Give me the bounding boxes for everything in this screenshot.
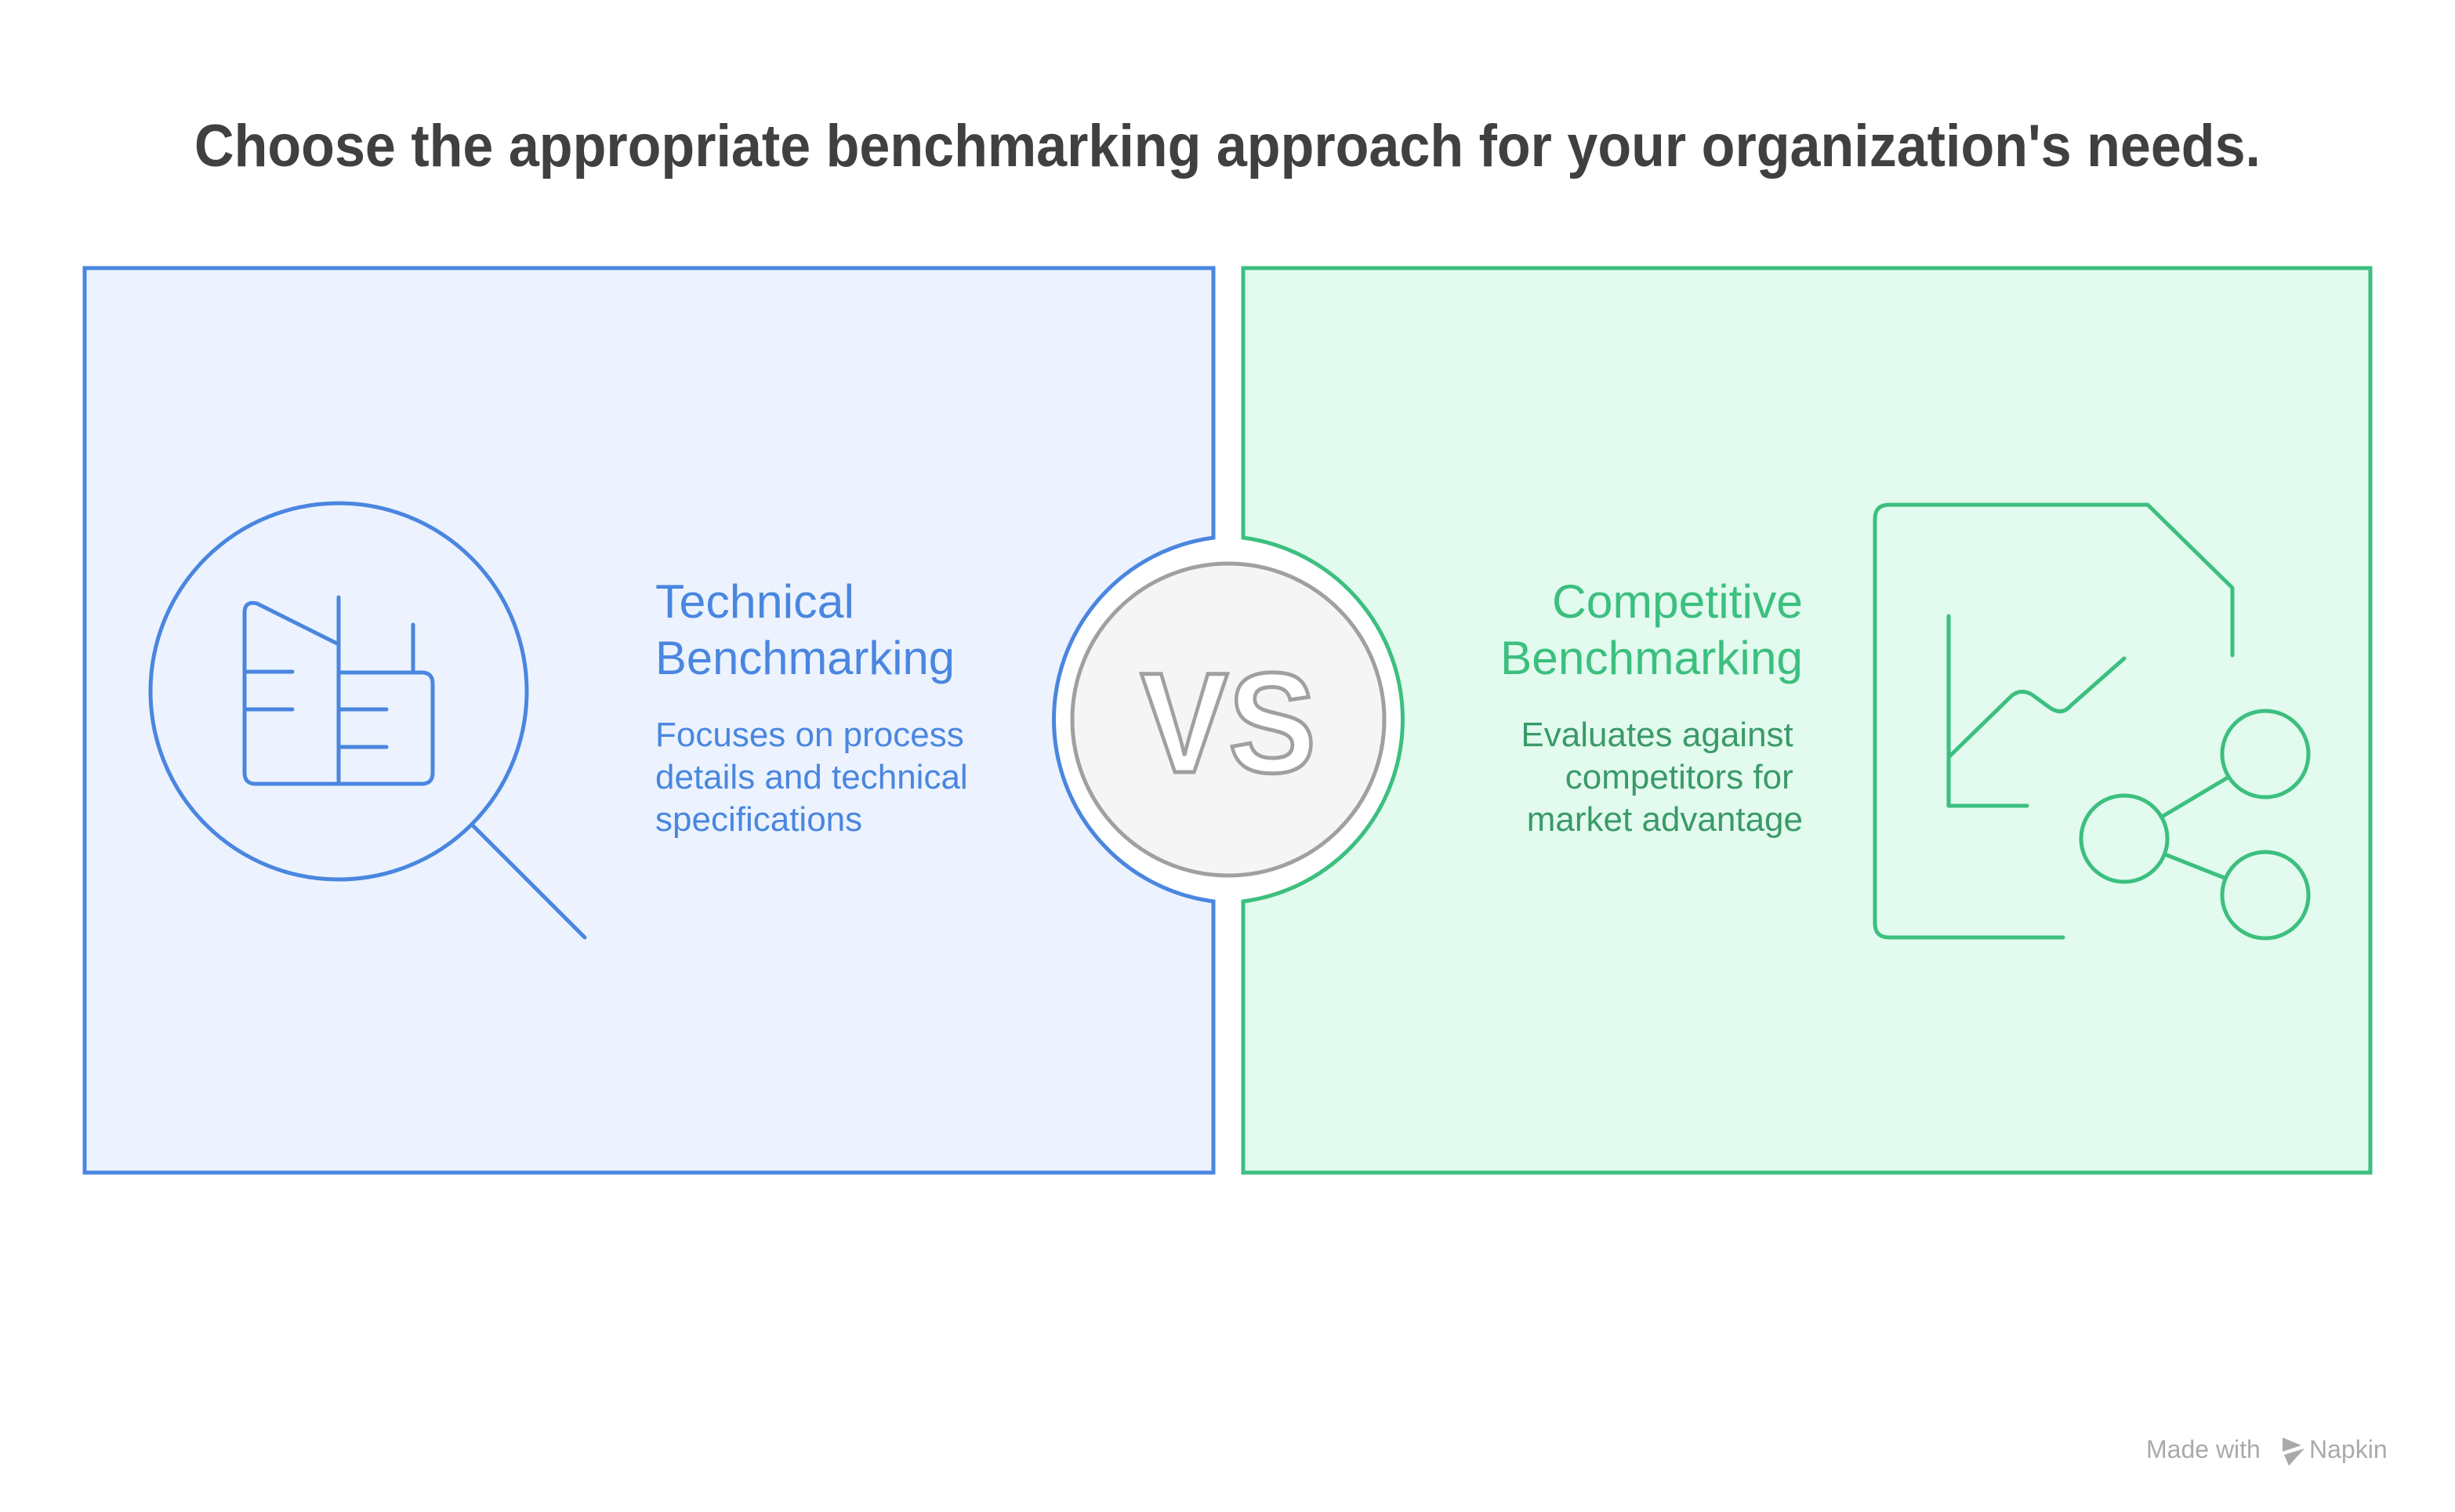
panel: competitive benchmarking xyxy=(1243,268,2370,1173)
footer: made with napkin: Napkin xyxy=(2309,1435,2388,1463)
title: Choose the appropriate benchmarking approach for your organization's needs. xyxy=(194,113,2261,179)
text: competitive description: market advantage xyxy=(1527,800,1803,839)
text: technical description: details and technical xyxy=(655,758,968,796)
panel: technical benchmarking: Benchmarking xyxy=(655,632,955,684)
icon: magnifier with factory xyxy=(150,503,585,937)
vs badge xyxy=(1072,564,1384,876)
vs badge: VS xyxy=(1140,643,1316,803)
footer: made with napkin xyxy=(2146,1435,2388,1466)
heading: competitive benchmarking: Competitive xyxy=(1552,575,1803,628)
text: competitive description: Evaluates against xyxy=(1521,716,1793,754)
icon: report with chart and share xyxy=(1875,505,2308,938)
text: competitive description: competitors for xyxy=(1565,758,1793,796)
text: technical description: Focuses on process xyxy=(655,716,964,754)
footer: made with napkin: Made with xyxy=(2146,1435,2261,1463)
panel: competitive benchmarking: Benchmarking xyxy=(1500,632,1803,684)
text: technical description: specifications xyxy=(655,800,862,839)
heading: technical benchmarking: Technical xyxy=(655,575,854,628)
panel: technical benchmarking xyxy=(85,268,1213,1173)
